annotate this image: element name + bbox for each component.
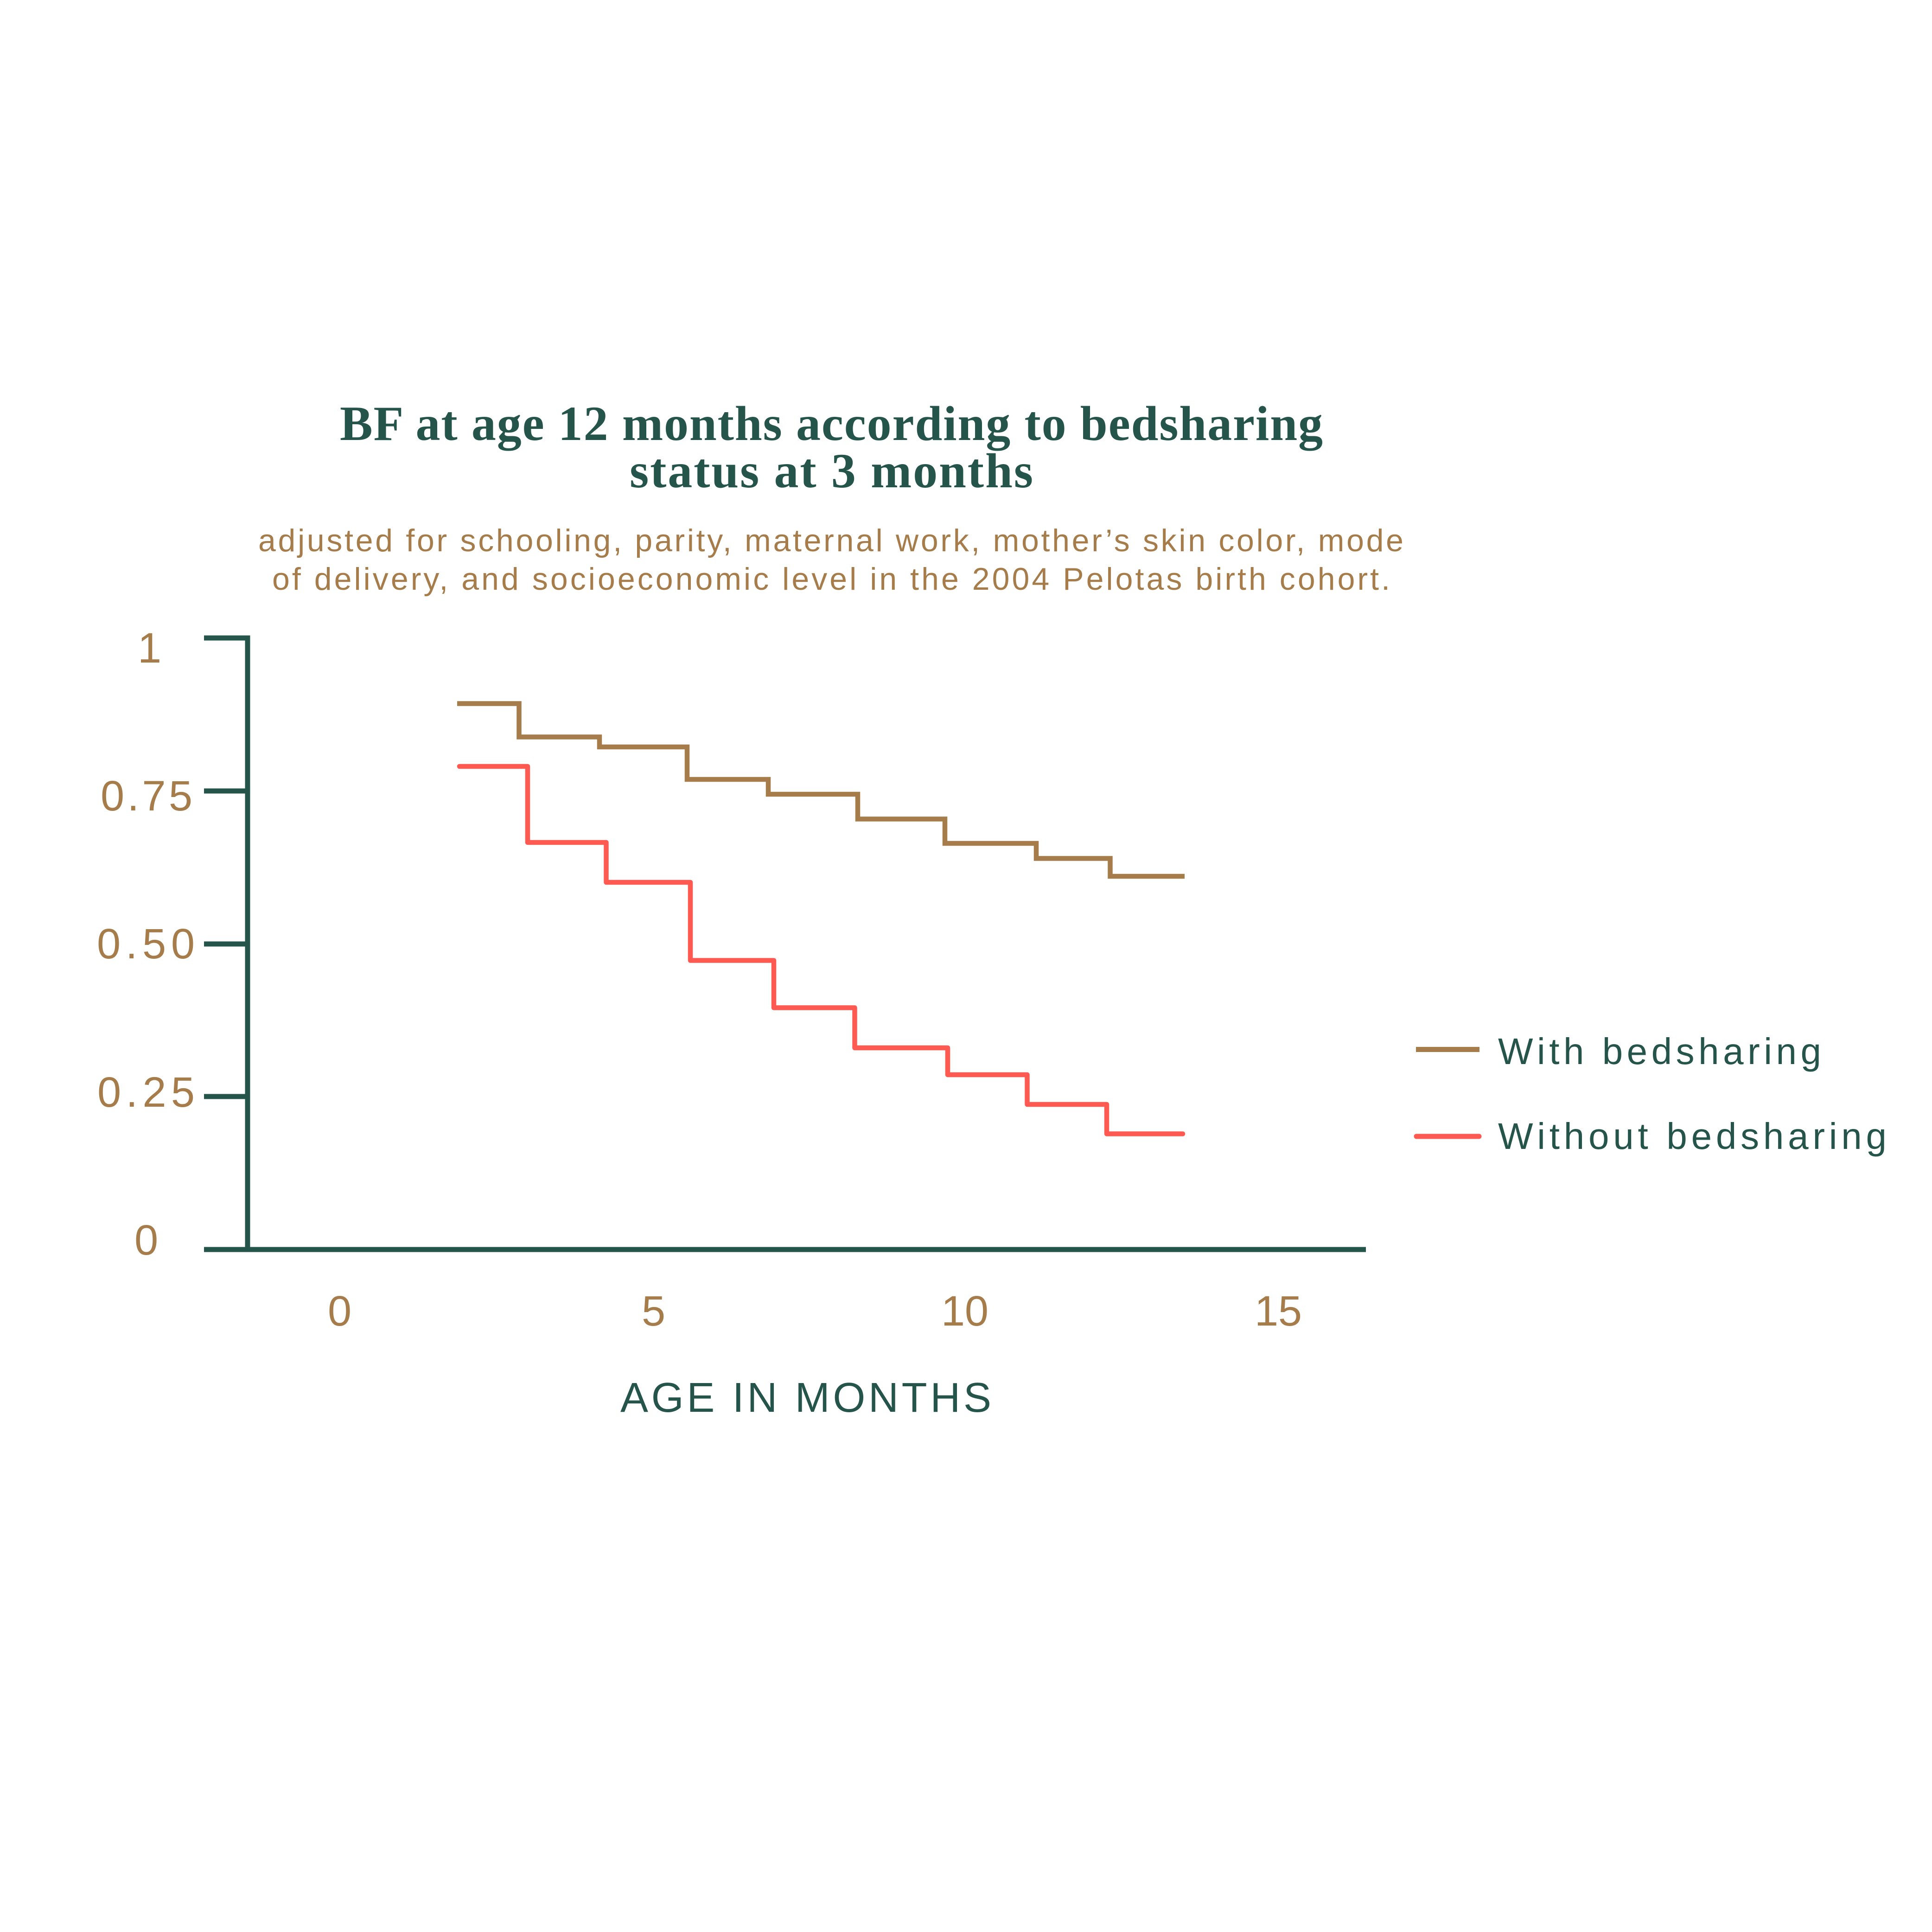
subtitle (258, 523, 1403, 597)
legend item: without bedsharing: Without bedsharing (1498, 1116, 1887, 1157)
line: without bedsharing (459, 766, 1183, 1134)
x axis labels (328, 1288, 1302, 1335)
line: with bedsharing (457, 704, 1185, 876)
y axis with ticks (204, 638, 248, 1250)
legend (1416, 1031, 1887, 1157)
x axis (204, 1247, 1366, 1252)
y axis labels: 0 (134, 1217, 158, 1264)
y axis labels: 0.50 (97, 920, 195, 968)
chart: breastfeeding probability by age (97, 625, 1366, 1421)
y axis labels: 1 (138, 625, 161, 672)
y axis labels (97, 625, 195, 1264)
title (340, 396, 1323, 498)
x axis labels: 10 (941, 1288, 988, 1335)
x axis labels: 15 (1255, 1288, 1302, 1335)
x axis title: AGE IN MONTHS (620, 1375, 991, 1421)
subtitle: of delivery, and socioeconomic level in the 2004 Pelotas birth cohort. (272, 561, 1390, 597)
title: BF at age 12 months according to bedsharing (340, 396, 1323, 451)
x axis labels: 5 (642, 1288, 665, 1335)
y axis labels: 0.75 (101, 772, 192, 820)
y axis labels: 0.25 (97, 1069, 195, 1116)
subtitle: adjusted for schooling, parity, maternal work, mother’s skin color, mode (258, 523, 1403, 558)
x axis labels: 0 (328, 1288, 351, 1335)
legend item: with bedsharing: With bedsharing (1498, 1031, 1821, 1072)
title: status at 3 months (630, 444, 1033, 498)
